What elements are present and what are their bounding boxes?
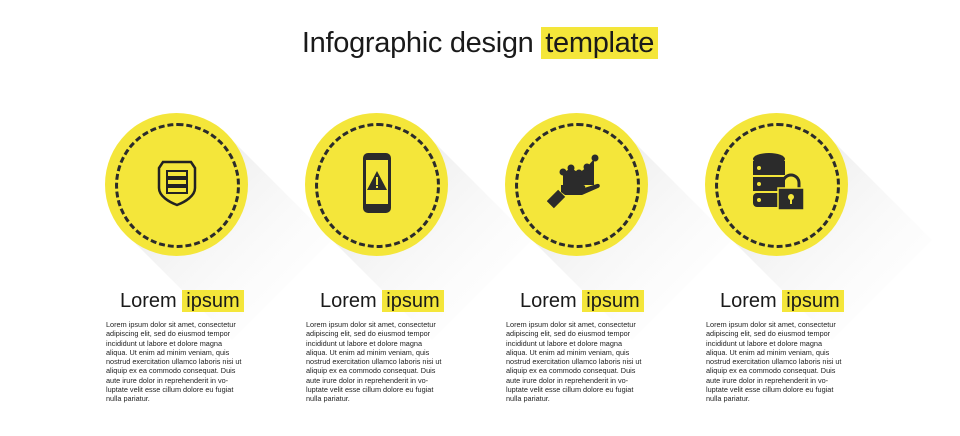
circle 4 (705, 113, 848, 256)
text 4: aliquip ex ea commodo consequat. Duis (706, 366, 835, 375)
text 4: luptate velit esse cillum dolore eu fugiat (706, 385, 833, 394)
circle 3 (505, 113, 648, 256)
text 4: nulla pariatur. (706, 394, 750, 403)
text 3: aute irure dolor in reprehenderit in vo- (506, 376, 628, 385)
text 2: aute irure dolor in reprehenderit in vo- (306, 376, 428, 385)
circle 4 shadow (736, 144, 876, 284)
icon: phone warning (363, 153, 391, 213)
text 1: Lorem ipsum dolor sit amet, consectetur (106, 320, 236, 329)
text 4: aliqua. Ut enim ad minim veniam, quis (706, 348, 829, 357)
text 3 (506, 320, 642, 403)
icon: shield server (158, 160, 196, 206)
icon: database lock (753, 153, 804, 210)
text 3: aliquip ex ea commodo consequat. Duis (506, 366, 635, 375)
text 1: luptate velit esse cillum dolore eu fugiat (106, 385, 233, 394)
text 1: aute irure dolor in reprehenderit in vo- (106, 376, 228, 385)
panel: item 1 (105, 113, 276, 403)
text 4: incididunt ut labore et dolore magna (706, 339, 822, 348)
text 4: aute irure dolor in reprehenderit in vo- (706, 376, 828, 385)
text 2: incididunt ut labore et dolore magna (306, 339, 422, 348)
icon: hand with chart (547, 154, 600, 208)
text 3: luptate velit esse cillum dolore eu fugiat (506, 385, 633, 394)
text 2: nulla pariatur. (306, 394, 350, 403)
text 4 (706, 320, 842, 403)
text 2: Lorem ipsum dolor sit amet, consectetur (306, 320, 436, 329)
text 2: nostrud exercitation ullamco laboris nisi ut (306, 357, 441, 366)
text 3: aliqua. Ut enim ad minim veniam, quis (506, 348, 629, 357)
text 3: nostrud exercitation ullamco laboris nisi ut (506, 357, 641, 366)
text 3: adipiscing elit, sed do eiusmod tempor (506, 329, 630, 338)
panel: item 2 (305, 113, 476, 403)
text 1: incididunt ut labore et dolore magna (106, 339, 222, 348)
heading 3: Lorem ipsum (520, 290, 640, 312)
text 1: nulla pariatur. (106, 394, 150, 403)
text 3: nulla pariatur. (506, 394, 550, 403)
circle 1 (105, 113, 248, 256)
text 1 (106, 320, 242, 403)
text 1: aliquip ex ea commodo consequat. Duis (106, 366, 235, 375)
text 2: adipiscing elit, sed do eiusmod tempor (306, 329, 430, 338)
text 3: Lorem ipsum dolor sit amet, consectetur (506, 320, 636, 329)
text 2: luptate velit esse cillum dolore eu fugiat (306, 385, 433, 394)
heading 1: Lorem ipsum (120, 290, 240, 312)
circle 2 (305, 113, 448, 256)
panel: item 3 (505, 113, 676, 403)
text 4: Lorem ipsum dolor sit amet, consectetur (706, 320, 836, 329)
text 4: nostrud exercitation ullamco laboris nisi ut (706, 357, 841, 366)
text 1: nostrud exercitation ullamco laboris nisi ut (106, 357, 241, 366)
text 3: incididunt ut labore et dolore magna (506, 339, 622, 348)
circle 3 shadow (536, 144, 676, 284)
text 1: adipiscing elit, sed do eiusmod tempor (106, 329, 230, 338)
heading 4: Lorem ipsum (720, 290, 840, 312)
title: Infographic design template (302, 27, 654, 59)
text 1: aliqua. Ut enim ad minim veniam, quis (106, 348, 229, 357)
circle 2 shadow (336, 144, 476, 284)
panel: item 4 (705, 113, 876, 403)
heading 2: Lorem ipsum (320, 290, 440, 312)
text 4: adipiscing elit, sed do eiusmod tempor (706, 329, 830, 338)
text 2: aliquip ex ea commodo consequat. Duis (306, 366, 435, 375)
text 2: aliqua. Ut enim ad minim veniam, quis (306, 348, 429, 357)
text 2 (306, 320, 442, 403)
circle 1 shadow (136, 144, 276, 284)
